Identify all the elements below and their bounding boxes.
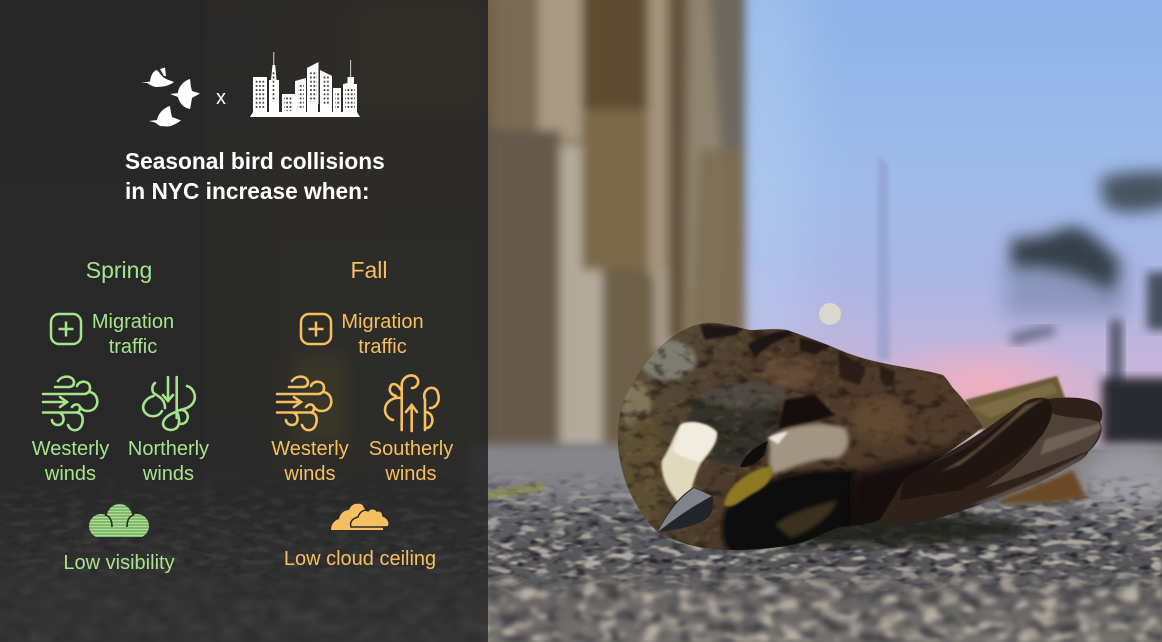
label: northerly winds: Northerly [128,438,209,460]
label: westerly winds: winds [283,463,336,485]
bird body [618,323,983,550]
flag pole [877,155,890,360]
rear tail feathers [965,376,1065,430]
icon: northerly wind [143,377,195,430]
cream head stripe [662,422,717,506]
warm cheek [620,415,664,525]
eyebrow stripe [768,424,849,475]
label: low cloud ceiling: Low cloud ceiling [284,548,436,570]
pale nape [640,340,696,380]
spring heading: Spring [86,257,152,283]
building [480,0,745,450]
label: northerly winds: winds [142,463,194,485]
label: westerly winds: Westerly [271,438,349,460]
label: westerly winds: winds [44,463,96,485]
bird [610,320,1102,555]
fall heading: Fall [350,257,388,283]
icon: three birds [141,68,200,126]
sky [730,0,1162,450]
dark back blotches [700,325,745,340]
dark building behind panel [0,0,488,500]
label: southerly winds: winds [384,463,437,485]
heading: Seasonal bird collisions [125,148,385,174]
label: migration traffic: Migration [92,311,174,333]
icon: plus box [51,314,81,344]
chestnut patches [850,398,910,442]
label: westerly winds: Westerly [32,438,109,460]
blurred tree [1005,171,1162,448]
dark crown [686,396,782,466]
heading: in NYC increase when: [125,178,370,204]
label: migration traffic: traffic [109,336,157,358]
icon: southerly wind [385,375,439,431]
icon: westerly wind [43,377,97,430]
mottled lower face [775,500,838,538]
feather mottling [624,330,850,545]
yellow lore [724,466,773,506]
column: spring [32,257,209,574]
label: migration traffic: Migration [341,311,424,333]
icon: low cloud ceiling [331,504,389,530]
wing feathers [860,398,1102,525]
icon: city skyline [250,52,360,117]
label: low visibility: Low visibility [63,552,175,574]
icon: westerly wind [277,377,331,430]
icon: plus box [301,314,331,344]
gravel texture [0,470,1162,642]
sunset glow [860,337,1110,433]
wing feather edges [985,413,1100,488]
bird shadow [690,513,1030,547]
pavement [0,444,1162,642]
dark throat [722,470,860,555]
moon [819,303,841,325]
label: migration traffic: traffic [358,336,407,358]
icon: low visibility cloud [85,506,152,536]
multiplication sign: x [216,87,226,109]
column: fall [271,257,453,570]
label: southerly winds: Southerly [369,438,453,460]
dark text panel [0,0,488,642]
beak [658,487,713,532]
eye slit [740,441,768,467]
